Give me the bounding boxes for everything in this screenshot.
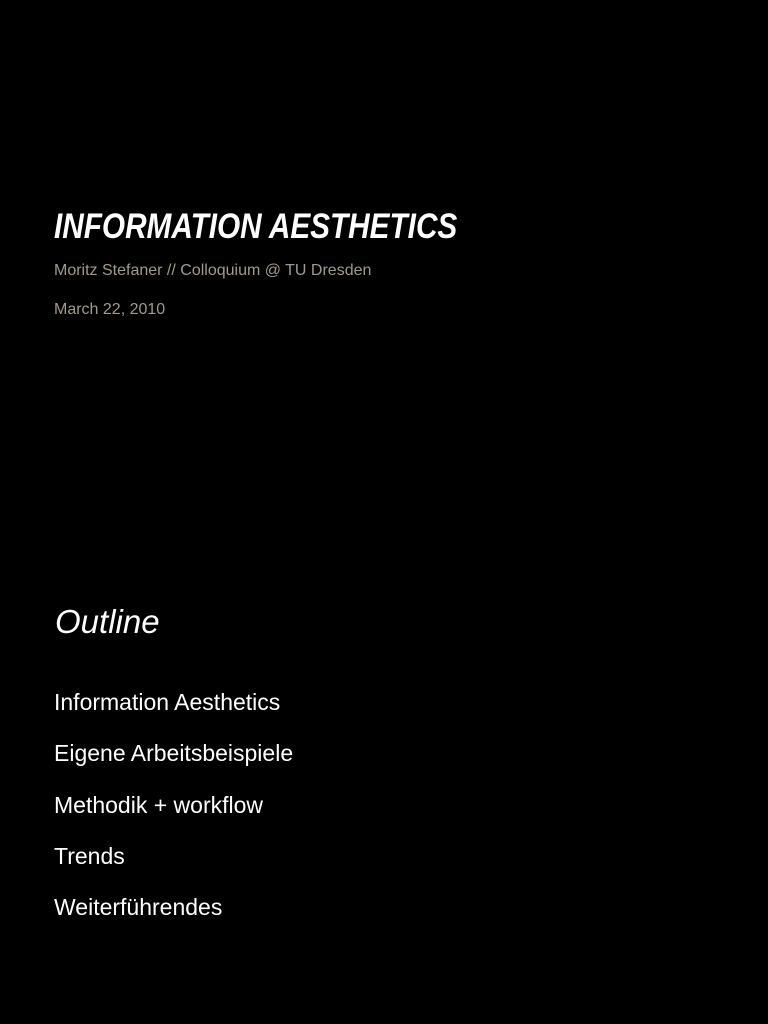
outline list: Trends bbox=[54, 843, 125, 869]
date: March 22, 2010 bbox=[54, 301, 165, 318]
subtitle: Moritz Stefaner // Colloquium @ TU Dresden bbox=[54, 262, 371, 279]
title: INFORMATION AESTHETICS bbox=[54, 207, 457, 246]
outline list: Eigene Arbeitsbeispiele bbox=[54, 740, 293, 766]
outline list: Information Aesthetics bbox=[54, 689, 280, 715]
heading: outline: Outline bbox=[55, 603, 160, 640]
outline list: Methodik + workflow bbox=[54, 792, 263, 818]
outline list bbox=[54, 689, 293, 920]
outline list: Weiterführendes bbox=[54, 894, 222, 920]
